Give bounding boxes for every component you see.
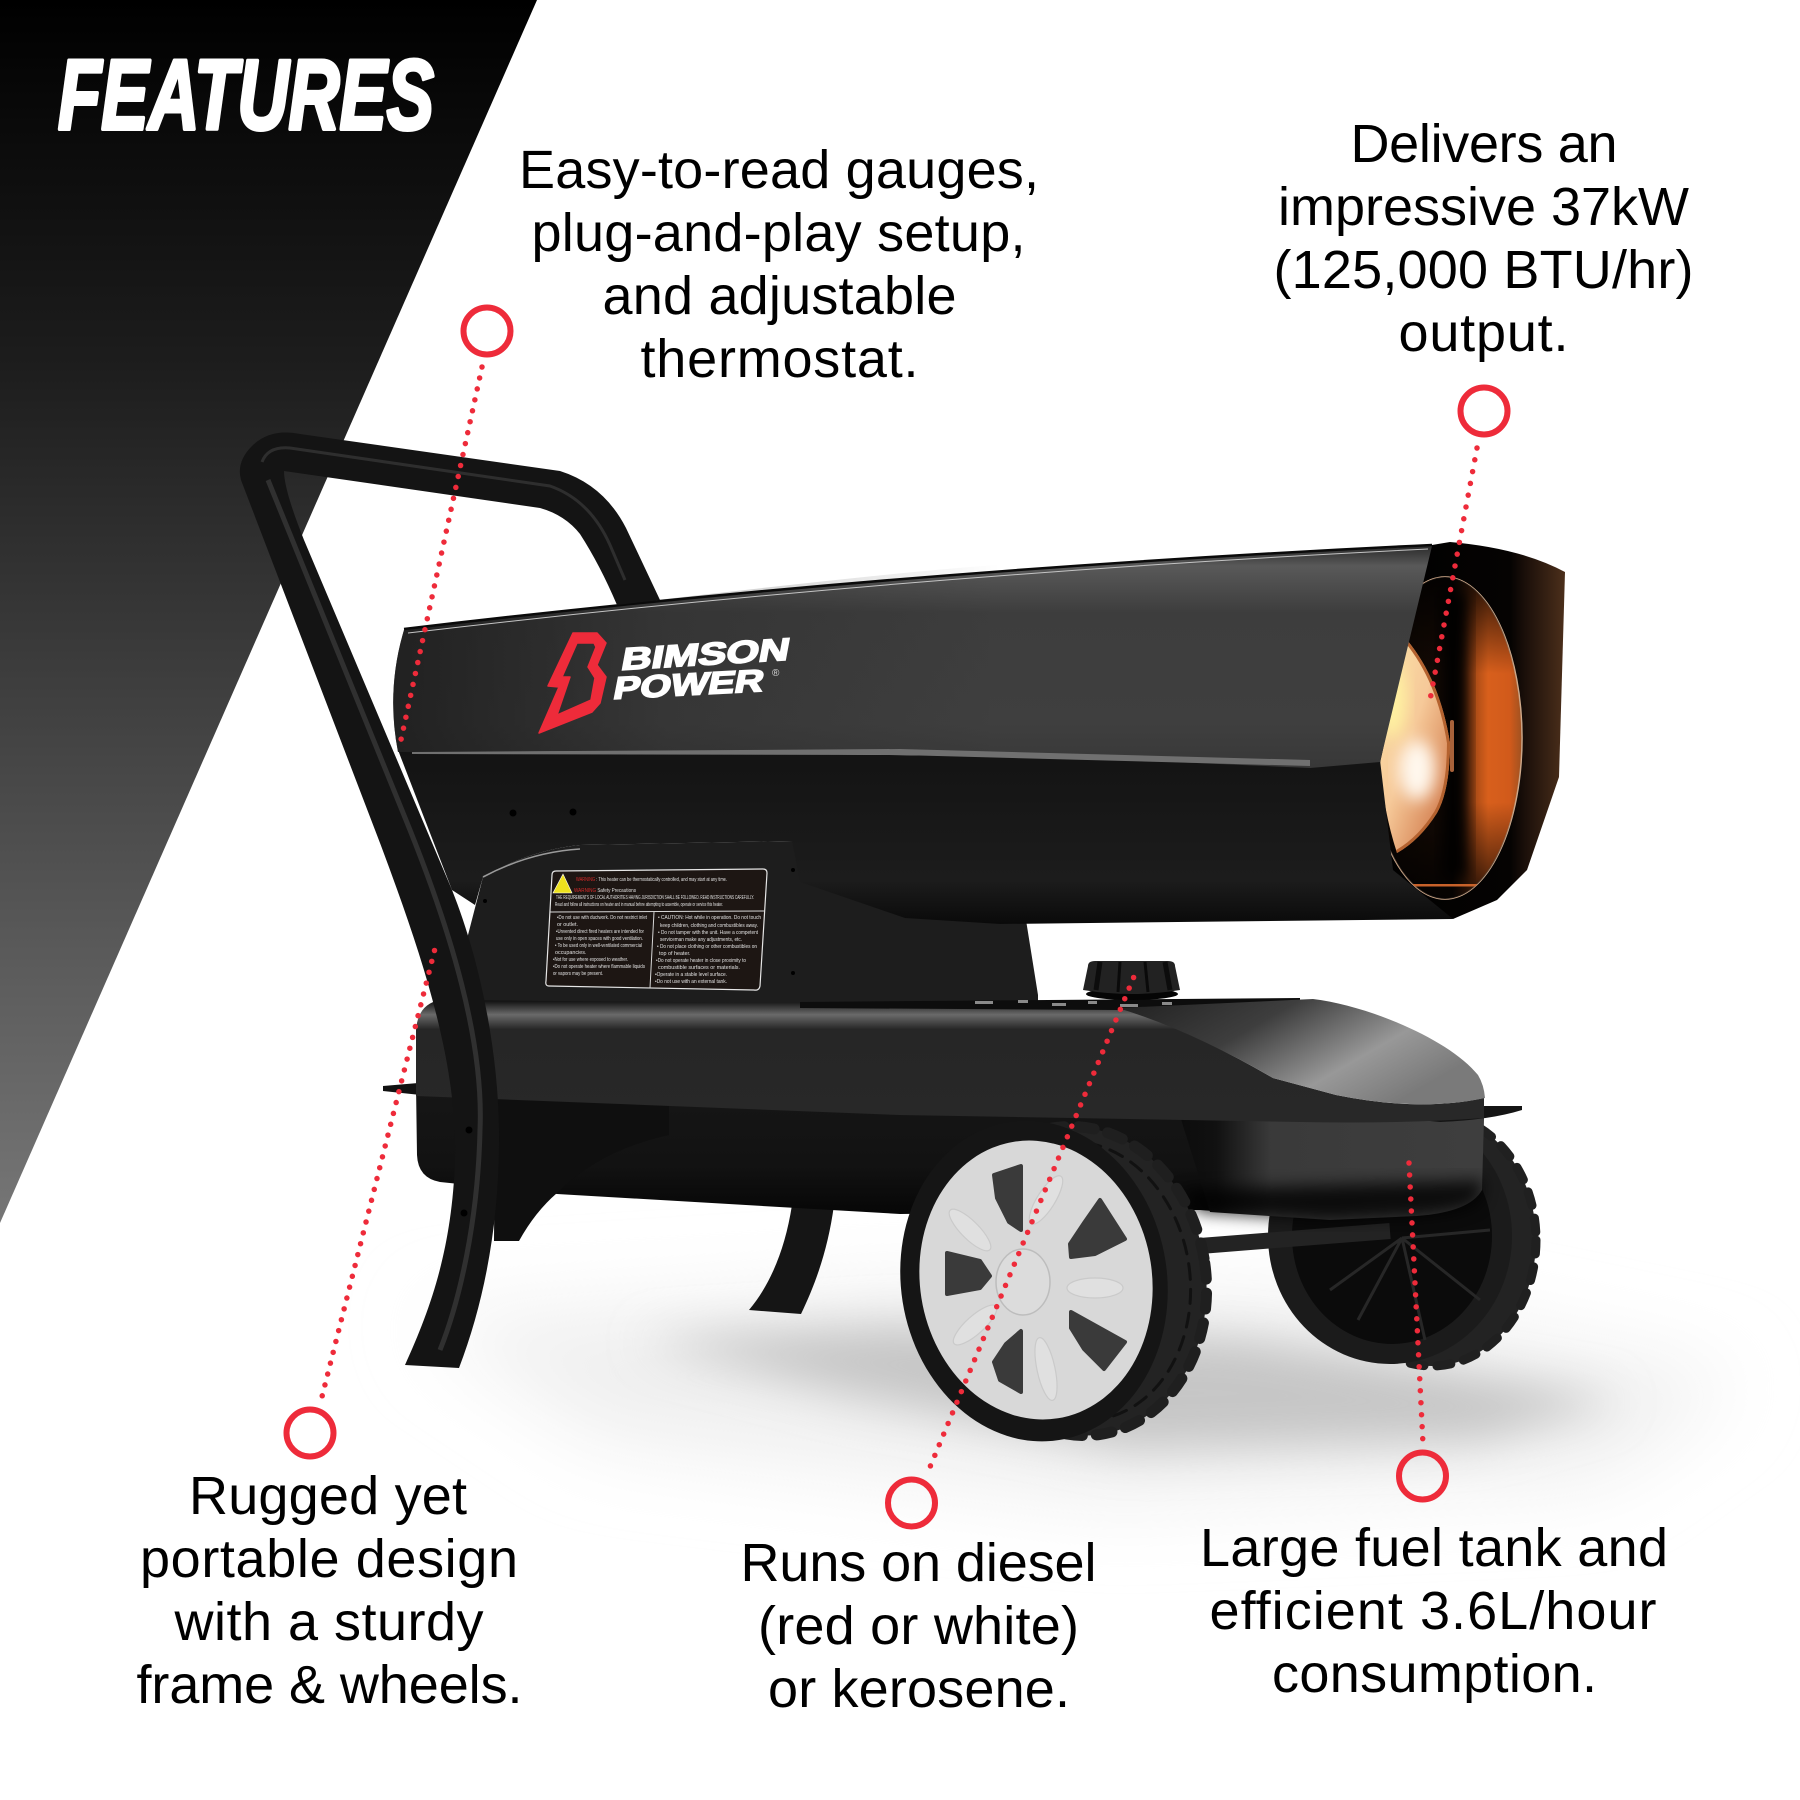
floor shadow xyxy=(420,1290,1740,1500)
tank lower right block xyxy=(1180,1116,1484,1220)
hub xyxy=(996,1249,1050,1315)
fan cone xyxy=(1380,640,1450,853)
callout: portable design xyxy=(136,950,522,1715)
safety warning label: •Do not use with an external tank. xyxy=(655,979,727,985)
safety warning label: THE REQUIREMENTS OF LOCAL AUTHORITIES HAVING JURISDICTION SHALL BE FOLLOWED. READ INSTRUCTIONS CAREFULLY. xyxy=(556,895,754,901)
safety warning label: use only in open spaces with good ventilation. xyxy=(556,936,643,942)
callout: top controls xyxy=(399,140,1039,749)
caption: Delivers an xyxy=(1350,114,1618,174)
left tank flange xyxy=(383,1082,430,1096)
safety warning label: •Do not use with ductwork. Do not restrict inlet xyxy=(557,915,647,921)
tank upper band xyxy=(416,1000,1484,1122)
drum upper panel xyxy=(393,545,1432,768)
marker circle xyxy=(464,308,510,354)
caption: and adjustable xyxy=(602,266,956,326)
caption: consumption. xyxy=(1272,1644,1597,1704)
deck vents xyxy=(975,1000,1172,1007)
caption: frame & wheels. xyxy=(136,1655,522,1715)
caption: (125,000 BTU/hr) xyxy=(1274,240,1694,300)
safety warning label: • Do not place clothing or other combustibles on xyxy=(657,944,757,950)
caption: plug-and-play setup, xyxy=(532,203,1026,263)
leader line xyxy=(1409,1163,1423,1444)
caption xyxy=(519,140,1039,389)
leader line xyxy=(1430,448,1477,700)
caption: efficient 3.6L/hour xyxy=(1210,1581,1657,1641)
caption: Large fuel tank and xyxy=(1200,1518,1668,1578)
tyre tread xyxy=(930,1110,1226,1452)
safety warning label: keep children, clothing and combustibles away. xyxy=(660,923,758,929)
caption: Rugged yet xyxy=(189,1466,467,1526)
screw holes xyxy=(483,808,795,975)
safety warning label: • To be used only in well-ventilated commercial xyxy=(555,943,642,949)
safety warning label: WARNING Safety Precautions xyxy=(574,888,636,894)
brand logo xyxy=(539,632,793,733)
caption xyxy=(1274,114,1694,363)
caption xyxy=(1200,1518,1668,1704)
caption: thermostat. xyxy=(640,329,918,389)
caption: Easy-to-read gauges, xyxy=(519,140,1039,200)
marker circle xyxy=(286,1410,334,1456)
safety warning label: •Do not operate heater where flammable liquids xyxy=(553,964,645,970)
callout: output xyxy=(1274,114,1694,700)
title: FEATURES xyxy=(58,39,434,150)
brand logo: POWER xyxy=(611,663,768,706)
tank top surface xyxy=(1118,999,1485,1104)
drum front opening xyxy=(1368,542,1565,919)
safety warning label: •Do not operate heater in close proximity to xyxy=(656,958,746,964)
handle frame xyxy=(240,432,660,1368)
caption: output. xyxy=(1398,303,1568,363)
right tank flange xyxy=(1400,1106,1522,1122)
caption xyxy=(740,1533,1096,1719)
axle xyxy=(1200,1231,1390,1246)
brand logo: ® xyxy=(772,668,780,679)
spoke embossing xyxy=(944,1171,1123,1402)
safety warning label: WARNING : This heater can be thermostatically controlled, and may start at any time. xyxy=(576,877,727,883)
caption: impressive 37kW xyxy=(1278,177,1689,237)
marker circle xyxy=(1460,388,1508,434)
rear wheel xyxy=(1268,1108,1536,1366)
callout: fuel types xyxy=(740,978,1134,1719)
filler cap knob xyxy=(1083,961,1180,1000)
support bracket xyxy=(494,1096,669,1241)
safety warning label: or outlet. xyxy=(557,922,578,928)
marker circle xyxy=(888,1480,935,1526)
safety warning label: or vapors may be present. xyxy=(553,971,603,977)
rim holes xyxy=(947,1166,1125,1392)
safety warning label: •Not for use where exposed to weather. xyxy=(553,957,628,963)
safety warning label: •Unvented direct fired heaters are intended for xyxy=(556,929,644,935)
drum lower section xyxy=(398,750,1453,924)
front wheel xyxy=(877,1101,1226,1461)
safety warning label: top of heater. xyxy=(659,951,690,957)
brand logo: BIMSON xyxy=(619,632,793,677)
caption xyxy=(136,1466,522,1715)
panel: dark gradient diagonal wedge xyxy=(0,0,537,1223)
safety warning label xyxy=(546,869,767,990)
pedestal housing xyxy=(462,841,1038,1006)
tank deck xyxy=(800,998,1300,1010)
housing top highlight xyxy=(483,849,580,877)
caption: Runs on diesel xyxy=(740,1533,1096,1593)
rear leg xyxy=(749,1205,834,1314)
caption: (red or white) xyxy=(758,1596,1079,1656)
safety warning label: • Do not tamper with the unit. Have a competent xyxy=(658,930,758,936)
tank lower section xyxy=(416,1085,1484,1220)
caption: or kerosene. xyxy=(768,1659,1070,1719)
caption: with a sturdy xyxy=(174,1592,484,1652)
safety warning label: • CAUTION: Hot while in operation. Do not touch xyxy=(658,915,761,921)
tyre face xyxy=(877,1101,1191,1461)
leader line xyxy=(321,950,434,1399)
caption: portable design xyxy=(140,1529,518,1589)
safety warning label: Read and follow all instructions on heater and in manual before attempting to assemble, operate or service this heater. xyxy=(555,902,723,908)
safety warning label: combustible surfaces or materials. xyxy=(658,965,740,971)
safety warning label: serviceman make any adjustments, etc. xyxy=(660,937,742,943)
leader line xyxy=(928,978,1134,1473)
safety warning label: occupancies. xyxy=(555,950,586,956)
rim xyxy=(900,1124,1172,1436)
leader line xyxy=(399,367,482,749)
heater product illustration xyxy=(240,432,1565,1461)
safety warning label: •Operate in a stable level surface. xyxy=(655,972,727,978)
callout: fuel tank xyxy=(1200,1163,1668,1704)
marker circle xyxy=(1399,1452,1446,1500)
